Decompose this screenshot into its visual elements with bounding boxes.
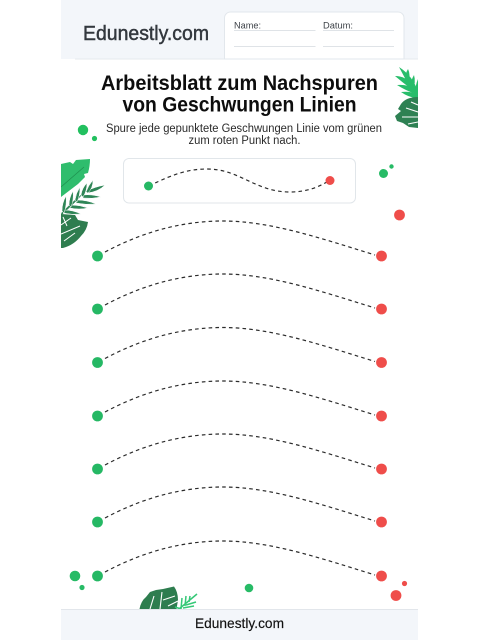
icon: top right leaves xyxy=(395,67,418,128)
palm frond xyxy=(175,594,197,609)
title: von Geschwungen Linien xyxy=(122,92,356,116)
tracing line 7 xyxy=(92,541,387,581)
icon: decorative dots right xyxy=(379,164,405,220)
instructions: zum roten Punkt nach. xyxy=(188,135,300,147)
icon: bottom leaves xyxy=(140,586,197,609)
tracing line 4 xyxy=(92,381,387,421)
footer text: Edunestly.com xyxy=(195,615,284,631)
monstera leaf xyxy=(61,214,88,248)
name and date card xyxy=(224,12,404,59)
tracing line 3 xyxy=(92,328,387,368)
tracing line 5 xyxy=(92,434,387,474)
sample start dot xyxy=(144,182,153,190)
date field xyxy=(323,20,394,47)
tracing line 6 xyxy=(92,487,387,527)
tracing line 2 xyxy=(92,274,387,314)
date field: Datum: xyxy=(323,20,353,30)
sample dashed line xyxy=(149,169,330,192)
header logo text: Edunestly.com xyxy=(83,23,209,45)
monstera leaf xyxy=(395,97,418,128)
header band xyxy=(61,0,418,60)
tracing line 1 xyxy=(92,221,387,261)
title: Arbeitsblatt zum Nachspuren xyxy=(101,71,378,95)
icon: decorative dots top xyxy=(78,125,97,141)
title xyxy=(101,71,378,116)
sample end dot xyxy=(326,176,334,185)
instructions: Spure jede gepunktete Geschwungen Linie vom grünen xyxy=(106,123,382,135)
instructions xyxy=(106,123,382,147)
bright leaf xyxy=(61,159,90,197)
icon: left leaves xyxy=(61,159,105,248)
name field xyxy=(234,20,316,47)
footer band xyxy=(61,609,418,640)
monstera leaf xyxy=(140,586,178,609)
name field: Name: xyxy=(234,20,261,30)
palm frond xyxy=(61,180,105,216)
icon: decorative dots bottom xyxy=(70,571,407,601)
palm frond xyxy=(395,67,418,98)
panel: sample curve xyxy=(124,158,356,203)
